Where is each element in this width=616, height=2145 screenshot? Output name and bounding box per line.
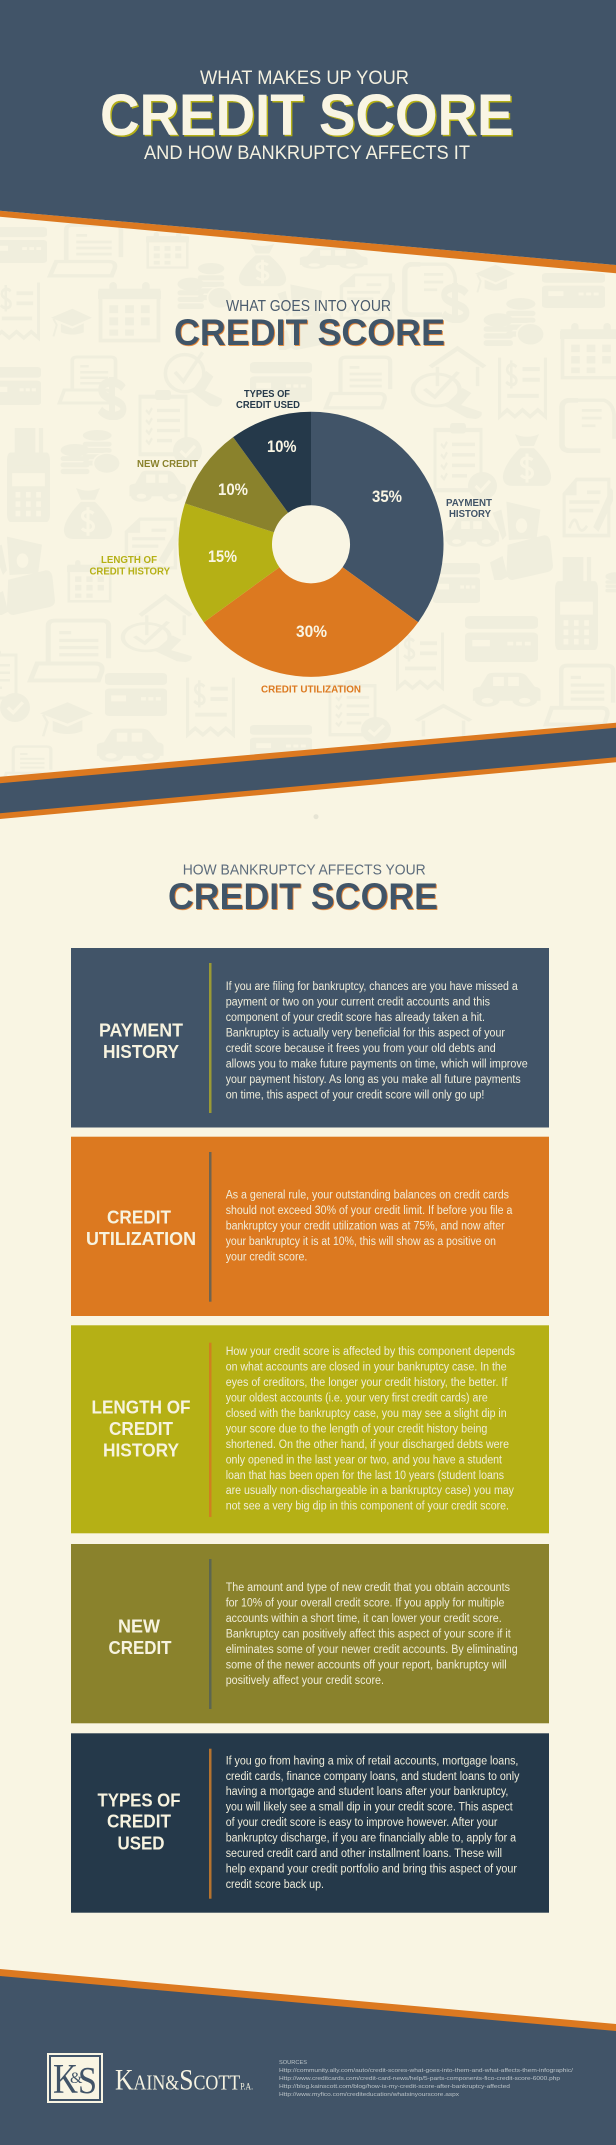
panel: credit utilization: should not exceed 30% of your credit limit. If before you file a <box>226 1205 513 1217</box>
logo: Kain and Scott mark: K <box>53 2057 78 2103</box>
panel: new credit: Bankruptcy can positively affect this aspect of your score if it <box>226 1628 511 1640</box>
panel: new credit: NEW <box>118 1616 161 1637</box>
panel: credit utilization: your credit score. <box>226 1252 307 1264</box>
panel: length of credit history: on what accounts are closed in your bankruptcy case. In the <box>226 1362 507 1374</box>
panel: length of credit history: your oldest accounts (i.e. your very first credit cards) are <box>226 1392 488 1404</box>
panel: types of credit used <box>71 1733 549 1913</box>
panel: length of credit history: shortened. On the other hand, if your discharged debts were <box>226 1439 509 1451</box>
chart labels: CREDIT UTILIZATION <box>261 684 361 696</box>
panel: credit utilization: CREDIT <box>107 1207 172 1228</box>
panel: credit utilization: your bankruptcy it is at 10%, this will show as a positive on <box>226 1236 496 1248</box>
panel: types of credit used: help expand your credit portfolio and bring this aspect of your <box>226 1864 517 1876</box>
panel: payment history: HISTORY <box>103 1041 180 1062</box>
main title: CREDIT SCORE <box>100 83 514 148</box>
panel: payment history: allows you to make future payments on time, which will improve <box>226 1058 528 1070</box>
panel: credit utilization: UTILIZATION <box>86 1228 196 1249</box>
panel: length of credit history: CREDIT <box>109 1418 174 1439</box>
panel: payment history: your payment history. As long as you make all future payments <box>226 1074 521 1086</box>
panel: new credit: for 10% of your overall credit score. If you apply for multiple <box>226 1598 504 1610</box>
panel: payment history: component of your credit score has already taken a hit. <box>226 1012 485 1024</box>
heading: what goes into your credit score: WHAT GOES INTO YOUR <box>226 298 391 315</box>
chart labels: PAYMENT <box>446 497 493 509</box>
donut chart: credit score components: 10% <box>267 438 297 456</box>
panel: new credit: accounts within a short time, it can lower your credit score. <box>226 1613 502 1625</box>
heading: how bankruptcy affects your credit score: HOW BANKRUPTCY AFFECTS YOUR <box>183 862 426 878</box>
panel: new credit: CREDIT <box>108 1637 172 1658</box>
chart labels: LENGTH OF <box>101 554 158 566</box>
sources: SOURCES <box>279 2060 307 2066</box>
logo: Kain and Scott mark: & <box>70 2070 83 2087</box>
panel: payment history <box>71 948 549 1128</box>
panel: types of credit used: CREDIT <box>107 1811 172 1832</box>
panel: new credit: The amount and type of new credit that you obtain accounts <box>226 1582 510 1594</box>
footer banner <box>0 1969 616 2145</box>
panel: types of credit used: USED <box>118 1832 164 1853</box>
chart labels: CREDIT HISTORY <box>90 566 170 578</box>
panel: payment history: Bankruptcy is actually very beneficial for this aspect of your <box>226 1027 505 1039</box>
panel: new credit: eliminates some of your newer credit accounts. By eliminating <box>226 1644 518 1656</box>
sources: Http://www.myfico.com/crediteducation/whatsinyourscore.aspx <box>279 2092 459 2098</box>
donut chart: credit score components: 10% <box>218 481 248 499</box>
logo: Kain and Scott mark: S <box>78 2060 97 2102</box>
panel: types of credit used: secured credit card and other installment loans. These will <box>226 1848 502 1860</box>
panel: types of credit used: credit cards, finance company loans, and student loans to only <box>226 1771 520 1783</box>
panel: length of credit history: eyes of creditors, the longer your credit history, the better. If <box>226 1377 508 1389</box>
chart labels: HISTORY <box>449 508 491 520</box>
main title: WHAT MAKES UP YOUR <box>200 68 409 89</box>
heading: how bankruptcy affects your credit score: CREDIT SCORE <box>168 875 438 917</box>
panel: types of credit used: you will likely see a small dip in your credit score. This aspect <box>226 1802 513 1814</box>
panel: types of credit used: TYPES OF <box>98 1789 180 1810</box>
panel: length of credit history: only opened in the last year or two, and you have a student <box>226 1454 503 1466</box>
heading: what goes into your credit score: CREDIT SCORE <box>174 311 445 353</box>
donut chart: credit score components: 30% <box>296 623 327 641</box>
panel: length of credit history: HISTORY <box>103 1439 180 1460</box>
header banner <box>0 0 616 273</box>
panel: length of credit history: How your credit score is affected by this component depends <box>226 1346 515 1358</box>
logo: wordmark: KAIN&SCOTTP.A. <box>115 2063 253 2096</box>
panel: types of credit used: having a mortgage and student loans after your bankruptcy, <box>226 1786 508 1798</box>
sources: Http://www.creditcards.com/credit-card-news/help/5-parts-components-fico-credit-score-6000.php <box>279 2076 560 2082</box>
panel: payment history: on time, this aspect of your credit score will only go up! <box>226 1089 484 1101</box>
sources: Http://blog.kainscott.com/blog/how-is-my-credit-score-after-bankruptcy-affected <box>279 2084 510 2090</box>
donut chart: credit score components <box>179 412 444 677</box>
chart labels: NEW CREDIT <box>137 458 199 470</box>
donut chart: credit score components: 15% <box>208 548 237 566</box>
donut chart: credit score components: 35% <box>372 488 402 506</box>
panel: length of credit history: your score due to the length of your credit history being <box>226 1423 487 1435</box>
panel: payment history: credit score because it frees you from your old debts and <box>226 1043 496 1055</box>
panel: payment history: payment or two on your current credit accounts and this <box>226 996 490 1008</box>
logo: Kain and Scott mark <box>47 2053 103 2103</box>
panel: length of credit history: are usually non-dischargeable in a bankruptcy case) you may <box>226 1485 514 1497</box>
panel: length of credit history: LENGTH OF <box>92 1397 190 1418</box>
main title: AND HOW BANKRUPTCY AFFECTS IT <box>144 143 470 164</box>
panel: payment history: PAYMENT <box>99 1020 184 1041</box>
panel: length of credit history: closed with the bankruptcy case, you may see a slight dip in <box>226 1408 507 1420</box>
panel: payment history: If you are filing for bankruptcy, chances are you have missed a <box>226 981 518 993</box>
panel: types of credit used: If you go from having a mix of retail accounts, mortgage loans, <box>226 1755 518 1767</box>
diagonal band <box>0 723 616 819</box>
panel: credit utilization <box>71 1137 549 1316</box>
panel: credit utilization: bankruptcy your credit utilization was at 75%, and now after <box>226 1221 505 1233</box>
panel: types of credit used: of your credit score is easy to improve however. After your <box>226 1817 498 1829</box>
panel: types of credit used: bankruptcy discharge, if you are financially able to, apply for a <box>226 1833 517 1845</box>
panel: credit utilization: As a general rule, your outstanding balances on credit cards <box>226 1190 509 1202</box>
panel: length of credit history <box>71 1325 549 1533</box>
chart labels: TYPES OF <box>244 388 291 400</box>
panel: new credit: some of the newer accounts off your report, bankruptcy will <box>226 1659 507 1671</box>
panel: length of credit history: not see a very big dip in this component of your credit score. <box>226 1501 509 1513</box>
panel: length of credit history: loan that has been open for the last 10 years (student loans <box>226 1470 504 1482</box>
chart labels <box>90 388 493 696</box>
panel: types of credit used: credit score back up. <box>226 1879 324 1891</box>
sources <box>279 2060 574 2098</box>
main title <box>100 68 514 164</box>
chart labels: CREDIT USED <box>236 399 300 411</box>
sources: Http://community.ally.com/auto/credit-scores-what-goes-into-them-and-what-affects-them-infographic/ <box>279 2068 574 2074</box>
panel: new credit: positively affect your credit score. <box>226 1675 384 1687</box>
panel: new credit <box>71 1544 549 1723</box>
